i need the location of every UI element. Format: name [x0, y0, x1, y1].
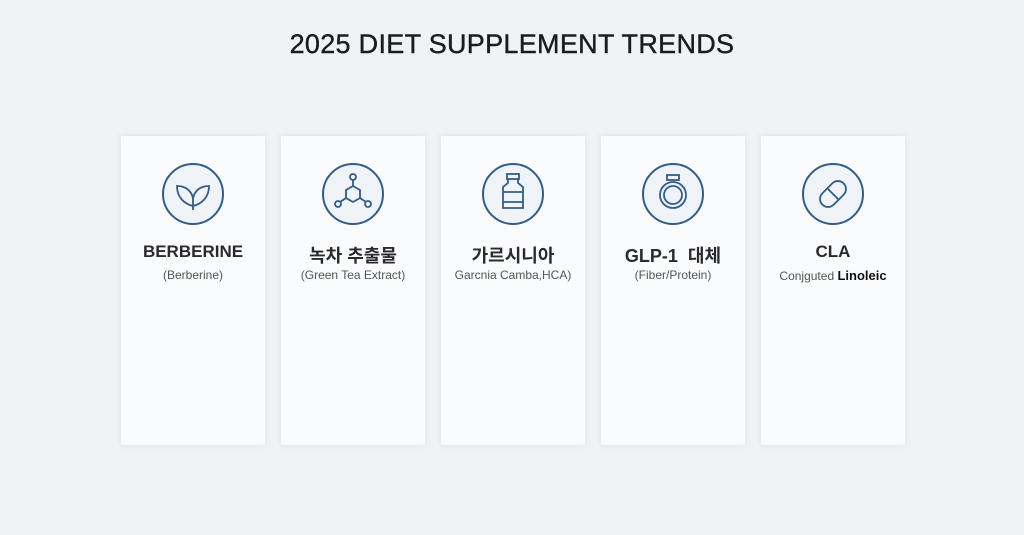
icon: flask	[642, 163, 704, 225]
heading: BERBERINE	[143, 242, 243, 261]
icon: capsule	[802, 163, 864, 225]
heading: CLA	[816, 242, 850, 261]
icon: leaves	[162, 163, 224, 225]
panel: green tea	[281, 136, 425, 445]
panel: cla	[761, 136, 905, 445]
panel: glp-1	[601, 136, 745, 445]
heading: 가르시니아	[472, 246, 554, 266]
subtitle: (Berberine)	[163, 268, 223, 282]
subtitle: (Green Tea Extract)	[301, 268, 405, 282]
subtitle: Conjguted Linoleic	[779, 268, 887, 283]
icon: bottle	[482, 163, 544, 225]
icon: molecule	[322, 163, 384, 225]
panel: berberine	[121, 136, 265, 445]
heading: GLP-1 대체	[625, 246, 721, 266]
heading: 녹차 추출물	[309, 246, 397, 266]
panel: garcinia	[441, 136, 585, 445]
subtitle: (Fiber/Protein)	[635, 268, 711, 282]
subtitle: Garcnia Camba,HCA)	[455, 268, 571, 282]
title: 2025 DIET SUPPLEMENT TRENDS	[290, 29, 734, 59]
